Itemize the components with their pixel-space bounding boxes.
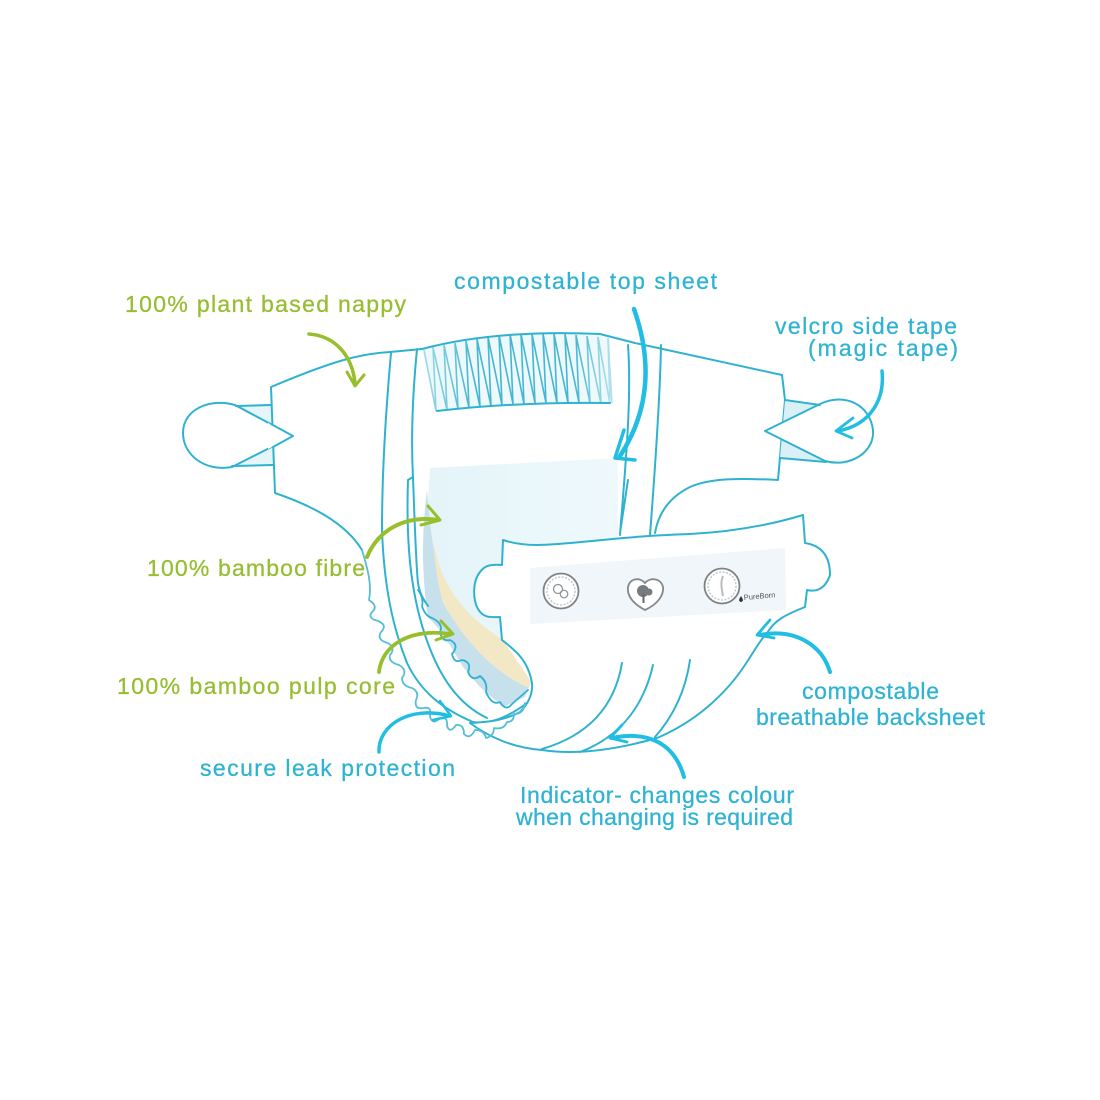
label: 100% bamboo fibre: 100% bamboo fibre bbox=[147, 555, 365, 581]
icon: heart with tree bbox=[628, 579, 663, 610]
right tab bbox=[765, 399, 873, 463]
arrow: velcro side tape bbox=[836, 371, 882, 438]
nappy illustration bbox=[183, 333, 873, 752]
bamboo fibre and pulp core layers bbox=[423, 490, 532, 707]
label: 100% plant based nappy: 100% plant based nappy bbox=[125, 291, 406, 317]
icon: round seal with rings bbox=[544, 574, 578, 608]
inner frill bbox=[418, 590, 528, 708]
right wing bbox=[655, 375, 785, 533]
label: indicator: Indicator- changes colour bbox=[520, 782, 794, 808]
arrow: plant based nappy bbox=[309, 334, 364, 386]
label: compostable breathable backsheet bbox=[756, 678, 986, 730]
label: indicator bbox=[515, 782, 794, 830]
backsheet bbox=[470, 515, 830, 752]
top edge bbox=[390, 333, 782, 375]
label: compostable breathable backsheet: compostable bbox=[802, 678, 939, 704]
arrow: compostable top sheet bbox=[615, 309, 646, 460]
outer frill bbox=[362, 550, 525, 738]
label: compostable top sheet: compostable top sheet bbox=[454, 268, 718, 294]
icon: round seal with leaf bbox=[704, 568, 740, 604]
arrow: indicator bbox=[610, 725, 684, 777]
waistband elastic bbox=[422, 333, 612, 411]
arrow: breathable backsheet bbox=[757, 620, 830, 672]
label: velcro side tape bbox=[775, 313, 958, 361]
left wing bbox=[271, 352, 391, 550]
arrow: secure leak protection bbox=[379, 701, 451, 752]
label: secure leak protection: secure leak protection bbox=[200, 755, 455, 781]
right leg lines bbox=[620, 345, 661, 535]
left tab bbox=[183, 403, 293, 468]
inner absorbent sheet bbox=[427, 458, 618, 683]
label: compostable breathable backsheet: breathable backsheet bbox=[756, 704, 986, 730]
label: indicator: when changing is required bbox=[515, 804, 793, 830]
left leg guards bbox=[382, 349, 527, 723]
indicator lines bbox=[542, 660, 690, 752]
label: 100% bamboo pulp core: 100% bamboo pulp core bbox=[117, 673, 395, 699]
brand mark: PureBorn bbox=[743, 590, 776, 602]
arrow: bamboo pulp core bbox=[379, 621, 453, 672]
label: velcro side tape: velcro side tape bbox=[775, 313, 957, 339]
label: velcro side tape: (magic tape) bbox=[808, 335, 958, 361]
arrow: bamboo fibre bbox=[367, 506, 440, 557]
printed panel bbox=[530, 548, 786, 624]
